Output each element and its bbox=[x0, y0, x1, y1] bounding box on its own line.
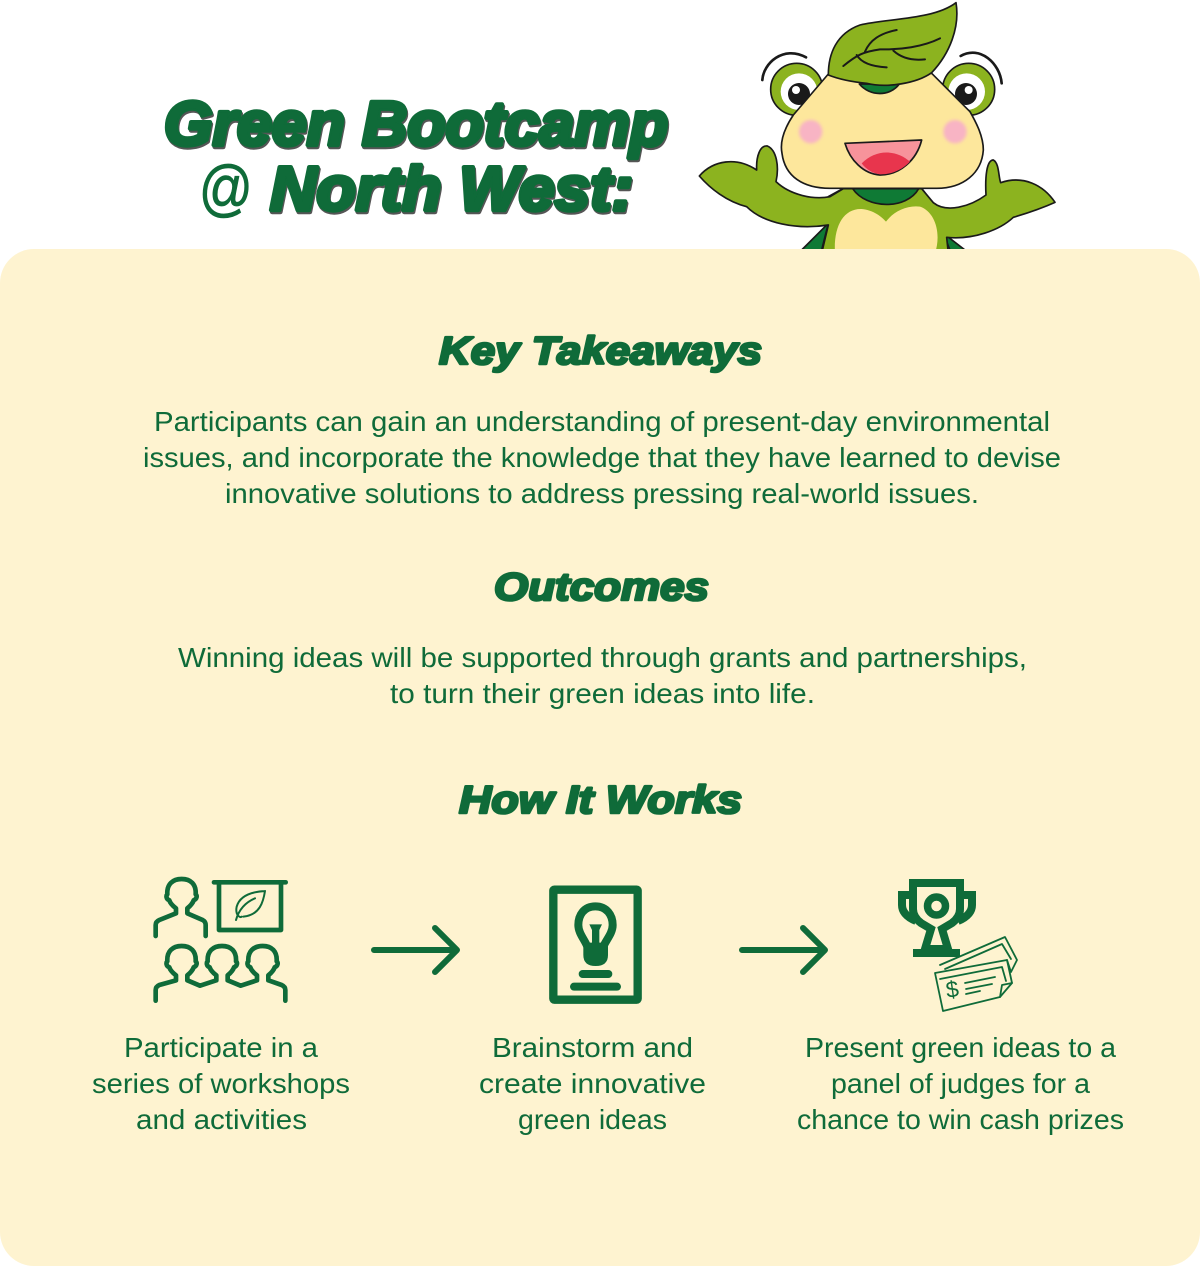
caption: step three bbox=[797, 1032, 1124, 1135]
caption: step two: create innovative bbox=[479, 1068, 706, 1099]
dollar sign: $ bbox=[944, 975, 961, 1003]
arrow: step one to two bbox=[374, 928, 457, 972]
text block: key takeaways bbox=[143, 406, 1061, 509]
caption: step three: Present green ideas to a bbox=[805, 1032, 1116, 1063]
text block: key takeaways: innovative solutions to address pressing real-world issues. bbox=[225, 478, 979, 509]
heading: outcomes: Outcomes bbox=[494, 566, 709, 609]
mascot head bbox=[781, 73, 983, 188]
caption: step one bbox=[92, 1032, 350, 1135]
caption: step three: panel of judges for a bbox=[831, 1068, 1090, 1099]
cheques bbox=[935, 937, 1017, 1011]
title text: North West: bbox=[270, 155, 633, 224]
mascot collar bbox=[853, 189, 919, 204]
caption: step one: series of workshops bbox=[92, 1068, 350, 1099]
text block: key takeaways: issues, and incorporate the knowledge that they have learned to devise bbox=[143, 442, 1061, 473]
title text: @ bbox=[198, 154, 252, 223]
mascot brows bbox=[762, 53, 1002, 83]
mascot body and arms bbox=[699, 146, 1055, 253]
mascot cape bbox=[802, 188, 965, 250]
caption: step two: green ideas bbox=[518, 1104, 667, 1135]
title text: Green Bootcamp bbox=[164, 90, 668, 159]
text block: outcomes: Winning ideas will be supported through grants and partnerships, bbox=[178, 642, 1027, 673]
mascot leaf bbox=[828, 3, 957, 85]
trophy bbox=[902, 883, 972, 957]
caption: step two bbox=[479, 1032, 706, 1135]
mascot: frog with leaf bbox=[699, 3, 1055, 253]
arrow: step two to three bbox=[742, 928, 825, 972]
caption: step one: Participate in a bbox=[124, 1032, 318, 1063]
icon: workshop audience and leaf board bbox=[156, 879, 286, 1001]
mascot belly bbox=[835, 206, 938, 253]
text block: outcomes: to turn their green ideas into life. bbox=[390, 678, 815, 709]
caption: step three: chance to win cash prizes bbox=[797, 1104, 1124, 1135]
mascot cheeks bbox=[799, 120, 967, 143]
title shadow: Green Bootcamp bbox=[165, 92, 669, 161]
mascot mouth bbox=[845, 140, 922, 175]
title text bbox=[164, 90, 668, 224]
caption: step one: and activities bbox=[136, 1104, 307, 1135]
mascot leaf collar bbox=[859, 84, 899, 93]
title shadow bbox=[165, 92, 669, 226]
title bbox=[164, 90, 669, 226]
mascot eyes bbox=[771, 63, 995, 115]
icon: lightbulb in frame bbox=[553, 890, 638, 1000]
title shadow: North West: bbox=[271, 157, 634, 226]
caption: step two: Brainstorm and bbox=[492, 1032, 693, 1063]
text block: key takeaways: Participants can gain an understanding of present-day environmental bbox=[154, 406, 1050, 437]
icon: trophy and cheques bbox=[902, 883, 1017, 1011]
heading: how it works: How It Works bbox=[459, 779, 742, 822]
heading: key takeaways: Key Takeaways bbox=[439, 330, 762, 373]
text block: outcomes bbox=[178, 642, 1027, 709]
